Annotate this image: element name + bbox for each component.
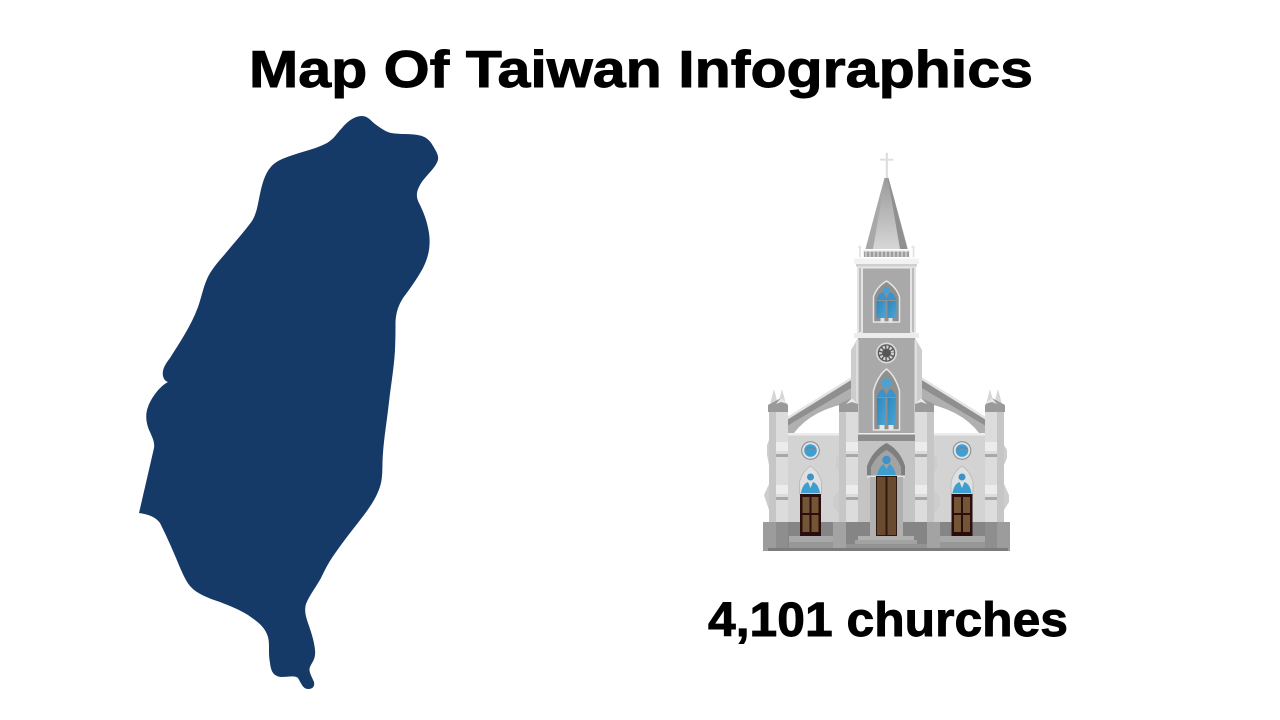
side door left [800, 466, 822, 536]
central door [867, 443, 905, 536]
map: Taiwan silhouette [139, 116, 438, 689]
round window left [802, 442, 819, 459]
clock [876, 342, 897, 364]
lower tower [851, 338, 922, 436]
nave body [788, 433, 985, 526]
icon: church [763, 153, 1010, 551]
stat label: churches: 4,101 churches [708, 594, 1068, 647]
upper tower [854, 258, 919, 338]
title: Map Of Taiwan Infographics [249, 41, 1033, 99]
flying buttresses [787, 376, 986, 433]
balustrade [858, 246, 915, 257]
tower window [874, 281, 900, 323]
tower lower window [874, 369, 900, 430]
cross [880, 153, 893, 178]
spire [866, 178, 908, 249]
base steps [763, 522, 1010, 551]
buttresses [764, 389, 1009, 525]
side door right [951, 466, 973, 536]
round window right [953, 442, 971, 459]
